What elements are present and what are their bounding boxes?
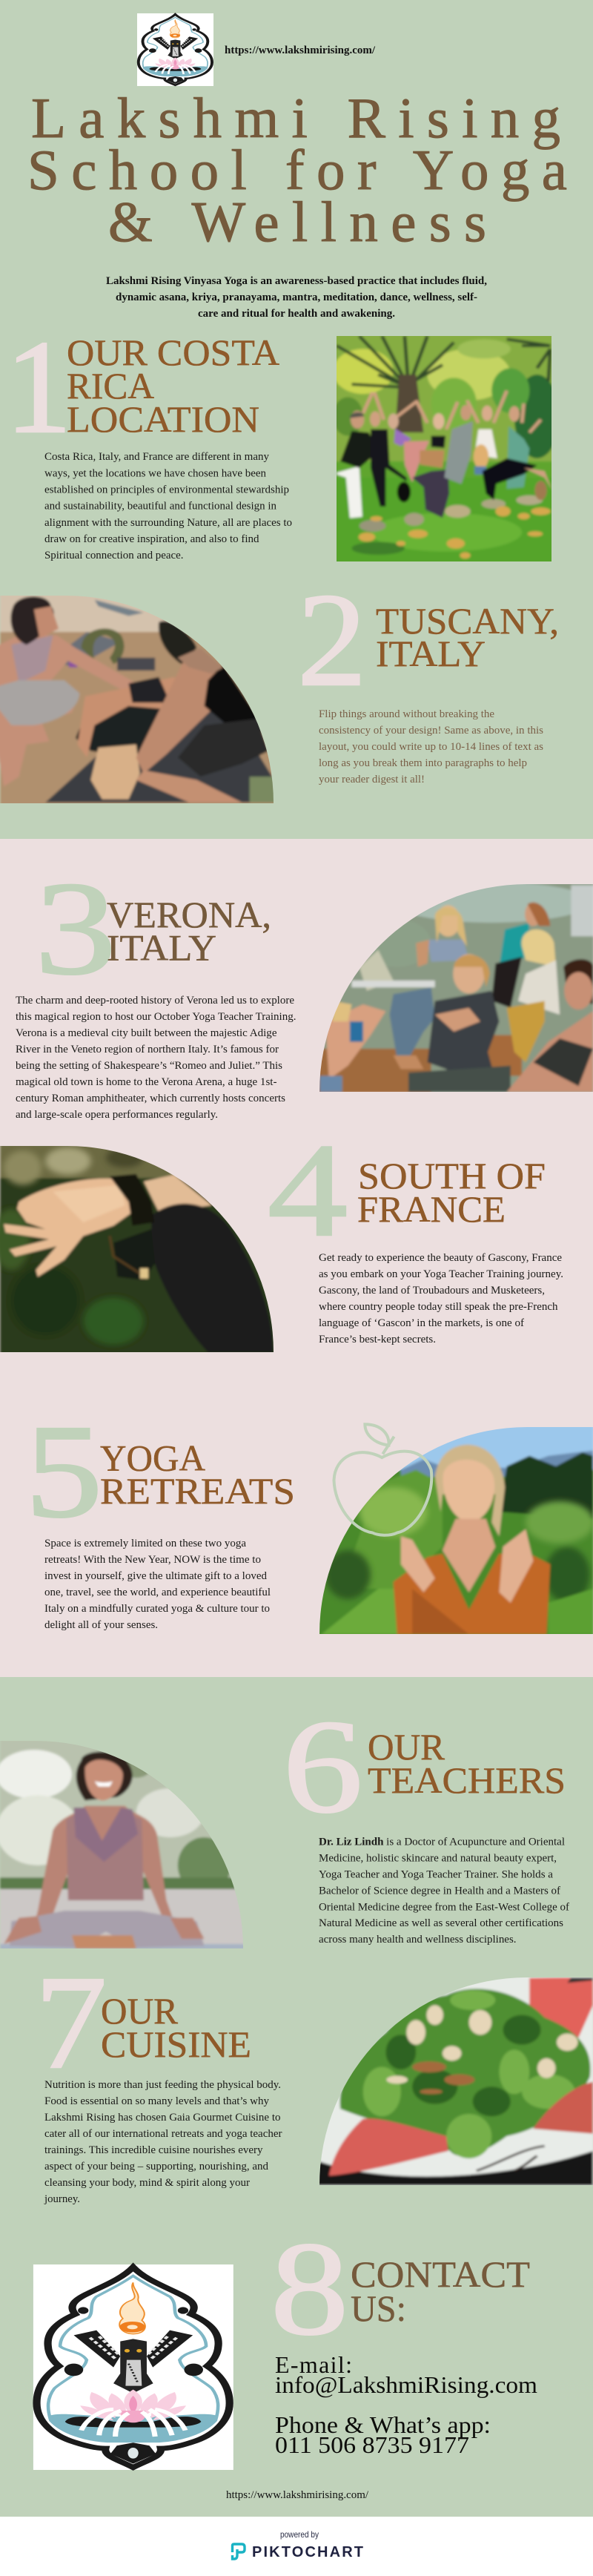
body text: south of france: [319, 1252, 563, 1345]
body text: our cuisine: journey.: [44, 2193, 80, 2205]
body text: our cuisine: [44, 2079, 282, 2205]
numeral 7: 7: [35, 1949, 107, 2096]
photo: hand in mudra with beads: [0, 1144, 276, 1355]
heading: yoga retreats: [100, 1437, 295, 1512]
heading: tuscany, italy: [376, 600, 559, 674]
panel: section 6 Our Teachers: [0, 1693, 569, 1949]
body text: yoga retreats: retreats! With the New Year, NOW is the time to: [44, 1554, 261, 1566]
footer: powered by piktochart: [0, 2517, 593, 2576]
heading: our costa rica location: RICA: [67, 365, 154, 406]
contact details: [275, 2351, 537, 2458]
body text: our teachers: Natural Medicine as well as several other certifications: [319, 1917, 563, 1929]
body text: verona: magical old town is home to the Verona Arena, a huge 1st-: [16, 1076, 277, 1088]
heading: tuscany, italy: ITALY: [376, 633, 486, 674]
photo: teacher seated in lotus pose: [0, 1739, 246, 1949]
panel: section 3 Verona: [16, 884, 593, 1120]
piktochart wordmark: PIKTOCHART: [252, 2544, 363, 2560]
title: Lakshmi Rising: [31, 86, 560, 150]
body text: yoga retreats: Italy on a mindfully curated yoga & culture tour to: [44, 1603, 270, 1615]
panel: section 5 Yoga Retreats: [33, 1423, 593, 1634]
body text: tuscany: Flip things around without breaking the: [319, 708, 494, 720]
logo: owl and lotus emblem: [137, 13, 213, 86]
body text: verona: this magical region to host our October Yoga Teacher Training.: [16, 1011, 296, 1023]
title: [27, 86, 567, 254]
heading: our cuisine: OUR: [101, 1990, 179, 2032]
body text: verona: being the setting of Shakespeare’s “Romeo and Juliet.” This: [16, 1060, 282, 1072]
heading: our teachers: TEACHERS: [368, 1759, 566, 1801]
heading: verona, italy: VERONA,: [107, 894, 271, 935]
body text: our teachers: Bachelor of Science degree in Health and a Masters of: [319, 1885, 560, 1897]
title: School for Yoga: [27, 138, 567, 202]
body text: costa rica: draw on for creative inspiration, and also to find: [44, 533, 259, 545]
numeral 4: 4: [268, 1117, 348, 1265]
body text: verona: [16, 995, 296, 1121]
body text: tuscany: layout, you could write up to 10-14 lines of text as: [319, 741, 543, 753]
intro text: [106, 275, 487, 320]
website link: https://www.lakshmirising.com/: [226, 2489, 369, 2501]
body text: yoga retreats: one, travel, see the world, and experience beautiful: [44, 1587, 271, 1598]
heading: tuscany, italy: TUSCANY,: [376, 600, 559, 642]
heading: our costa rica location: LOCATION: [67, 398, 259, 440]
body text: our teachers: Oriental Medicine degree from the East-West College of: [319, 1902, 569, 1914]
body text: our cuisine: trainings. This incredible cuisine nourishes every: [44, 2144, 263, 2156]
body text: yoga retreats: [44, 1538, 271, 1631]
intro text: care and ritual for health and awakening.: [198, 308, 395, 320]
heading: south of france: SOUTH OF: [358, 1155, 546, 1196]
panel: section 8 Contact: [33, 2215, 537, 2501]
photo: salad with watermelon: [318, 1975, 593, 2188]
body text: costa rica: Spiritual connection and peace.: [44, 550, 184, 561]
heading: yoga retreats: RETREATS: [100, 1470, 295, 1512]
pink band background: [0, 839, 593, 1677]
body text: our cuisine: cleansing your body, mind & spirit along your: [44, 2177, 250, 2189]
panel: section 4 South of France: [0, 1146, 563, 1352]
body text: our cuisine: Food is essential on so many levels and that’s why: [44, 2095, 269, 2107]
heading: our cuisine: [101, 1990, 251, 2065]
panel: section 1 Costa Rica: [16, 336, 551, 561]
body text: verona: Verona is a medieval city built between the majestic Adige: [16, 1027, 277, 1039]
body text: costa rica: Costa Rica, Italy, and France are different in many: [44, 451, 269, 463]
body text: our teachers: [319, 1837, 569, 1946]
body text: our cuisine: Nutrition is more than just feeding the physical body.: [44, 2079, 281, 2091]
photo: yoga students in a circle: [318, 882, 593, 1093]
body text: south of france: France’s best-kept secrets.: [319, 1334, 436, 1345]
body text: south of france: Get ready to experience the beauty of Gascony, France: [319, 1252, 562, 1264]
heading: contact us: [351, 2253, 530, 2329]
body text: verona: and large-scale opera performances regularly.: [16, 1109, 218, 1121]
body text: south of france: where country people today still speak the pre-French: [319, 1301, 558, 1313]
contact details: 011 506 8735 9177: [275, 2431, 469, 2458]
photo: woman meditating in vineyard: [318, 1424, 593, 1638]
body text: our teachers: Dr. Liz Lindh is a Doctor of Acupuncture and Oriental: [319, 1837, 565, 1848]
numeral 6: 6: [283, 1693, 362, 1841]
body text: our teachers: Yoga Teacher and Yoga Teacher Trainer. She holds a: [319, 1869, 553, 1881]
intro text: dynamic asana, kriya, pranayama, mantra, meditation, dance, wellness, self-: [116, 291, 477, 303]
body text: yoga retreats: Space is extremely limited on these two yoga: [44, 1538, 246, 1549]
body text: our cuisine: cater all of our international retreats and yoga teacher: [44, 2128, 282, 2140]
body text: tuscany: consistency of your design! Same as above, in this: [319, 725, 543, 737]
heading: our cuisine: CUISINE: [101, 2023, 251, 2065]
powered by label: powered by: [280, 2529, 319, 2540]
heading: contact us: CONTACT: [351, 2253, 530, 2295]
body text: our teachers: across many health and wellness disciplines.: [319, 1934, 516, 1946]
photo: yoga adjustment on wood floor: [0, 593, 276, 806]
header: [137, 13, 376, 86]
heading: our teachers: [368, 1726, 566, 1801]
body text: yoga retreats: delight all of your senses.: [44, 1619, 158, 1631]
panel: section 2 Tuscany: [0, 595, 557, 803]
heading: south of france: [357, 1155, 546, 1230]
body text: verona: The charm and deep-rooted history of Verona led us to explore: [16, 995, 294, 1007]
heading: verona, italy: [107, 894, 271, 969]
body text: south of france: language of ‘Gascon’ in the markets, is one of: [319, 1317, 524, 1329]
body text: yoga retreats: invest in yourself, give the ultimate gift to a loved: [44, 1570, 267, 1582]
heading: contact us: US:: [351, 2287, 406, 2329]
body text: costa rica: and sustainability, beautiful and functional design in: [44, 500, 276, 512]
photo: group yoga in the jungle: [333, 333, 560, 564]
logo: large owl and lotus emblem: [33, 2264, 233, 2470]
heading: verona, italy: ITALY: [107, 927, 216, 969]
website link: https://www.lakshmirising.com/: [225, 45, 376, 56]
body text: tuscany: your reader digest it all!: [319, 774, 425, 785]
body text: costa rica: [44, 451, 292, 561]
numeral 5: 5: [25, 1397, 102, 1546]
body text: south of france: Gascony, the land of Troubadours and Musketeers,: [319, 1285, 545, 1297]
intro text: Lakshmi Rising Vinyasa Yoga is an awareness-based practice that includes fluid,: [106, 275, 487, 287]
body text: tuscany: [319, 708, 543, 785]
heading: our costa rica location: [67, 332, 279, 440]
body text: verona: century Roman amphitheater, which currently hosts concerts: [16, 1093, 285, 1104]
body text: south of france: as you embark on your Yoga Teacher Training journey.: [319, 1268, 563, 1280]
heading: yoga retreats: YOGA: [100, 1437, 205, 1479]
heading: south of france: FRANCE: [357, 1188, 506, 1230]
panel: section 7 Our Cuisine: [35, 1949, 593, 2205]
body text: costa rica: ways, yet the locations we have chosen have been: [44, 467, 266, 479]
contact details: E-mail:: [275, 2351, 352, 2378]
numeral 1: 1: [5, 313, 72, 461]
body text: tuscany: long as you break them into paragraphs to help: [319, 757, 527, 769]
body text: our cuisine: Lakshmi Rising has chosen Gaia Gourmet Cuisine to: [44, 2112, 280, 2124]
icon: piktochart mark: [233, 2544, 245, 2559]
title: & Wellness: [108, 190, 486, 254]
contact details: info@LakshmiRising.com: [275, 2371, 537, 2398]
body text: our teachers: Medicine, holistic skincare and natural beauty expert,: [319, 1853, 557, 1865]
heading: our costa rica location: OUR COSTA: [67, 332, 279, 373]
body text: costa rica: established on principles of environmental stewardship: [44, 484, 289, 495]
numeral 3: 3: [35, 854, 116, 1002]
body text: our cuisine: aspect of your being – supporting, nourishing, and: [44, 2161, 268, 2173]
numeral 2: 2: [297, 565, 367, 714]
heading: our teachers: OUR: [368, 1726, 445, 1768]
body text: verona: River in the Veneto region of northern Italy. It’s famous for: [16, 1044, 279, 1055]
icon: apple outline: [334, 1424, 431, 1535]
contact details: Phone & What’s app:: [275, 2411, 491, 2438]
body text: costa rica: alignment with the surrounding Nature, all are places to: [44, 517, 292, 529]
numeral 8: 8: [271, 2215, 348, 2363]
